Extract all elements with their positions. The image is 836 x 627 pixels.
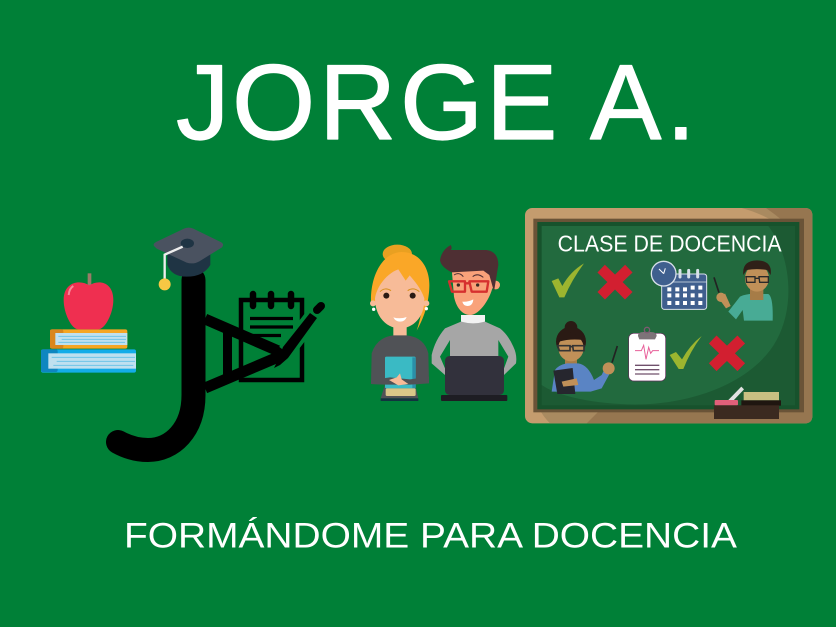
illustration: man with laptop xyxy=(432,245,516,401)
frame xyxy=(525,208,812,423)
icon: notepad xyxy=(241,294,302,380)
board heading: CLASE DE DOCENCIA xyxy=(558,231,782,257)
title: JORGE A. xyxy=(176,42,696,162)
laptop xyxy=(445,356,504,395)
vertical strut xyxy=(223,328,232,380)
lower strut xyxy=(205,355,283,388)
J stem and hook xyxy=(118,280,194,450)
icon: calendar with clock xyxy=(651,261,707,309)
book: top orange xyxy=(50,329,127,349)
icon: red cross xyxy=(605,272,625,292)
illustration: woman with books xyxy=(370,245,429,401)
neck xyxy=(393,323,407,338)
upper strut xyxy=(205,319,283,353)
icon: apple on books xyxy=(41,273,136,373)
arms xyxy=(371,377,429,385)
icon: red cross xyxy=(717,343,737,363)
letter J with struts xyxy=(118,280,283,450)
tan book xyxy=(386,388,416,396)
icon: graduation cap xyxy=(154,228,223,290)
teacher: woman xyxy=(552,321,617,394)
icon: check mark xyxy=(552,263,584,297)
body xyxy=(371,335,429,398)
body xyxy=(432,322,516,375)
hair xyxy=(371,245,429,331)
book: bottom blue xyxy=(41,349,136,373)
hair xyxy=(440,245,498,292)
head xyxy=(449,268,500,315)
icon: pencil xyxy=(274,306,321,368)
subtitle: FORMÁNDOME PARA DOCENCIA xyxy=(124,516,738,556)
icon: check mark xyxy=(670,336,702,369)
teacher: man xyxy=(714,260,773,321)
panel: chalkboard xyxy=(525,208,812,423)
apple xyxy=(64,273,113,329)
face xyxy=(370,269,429,328)
collar xyxy=(461,315,485,323)
teal book xyxy=(385,357,416,388)
eraser and chalk tray xyxy=(714,387,781,419)
board surface xyxy=(542,226,795,405)
icon: clipboard xyxy=(629,327,666,381)
